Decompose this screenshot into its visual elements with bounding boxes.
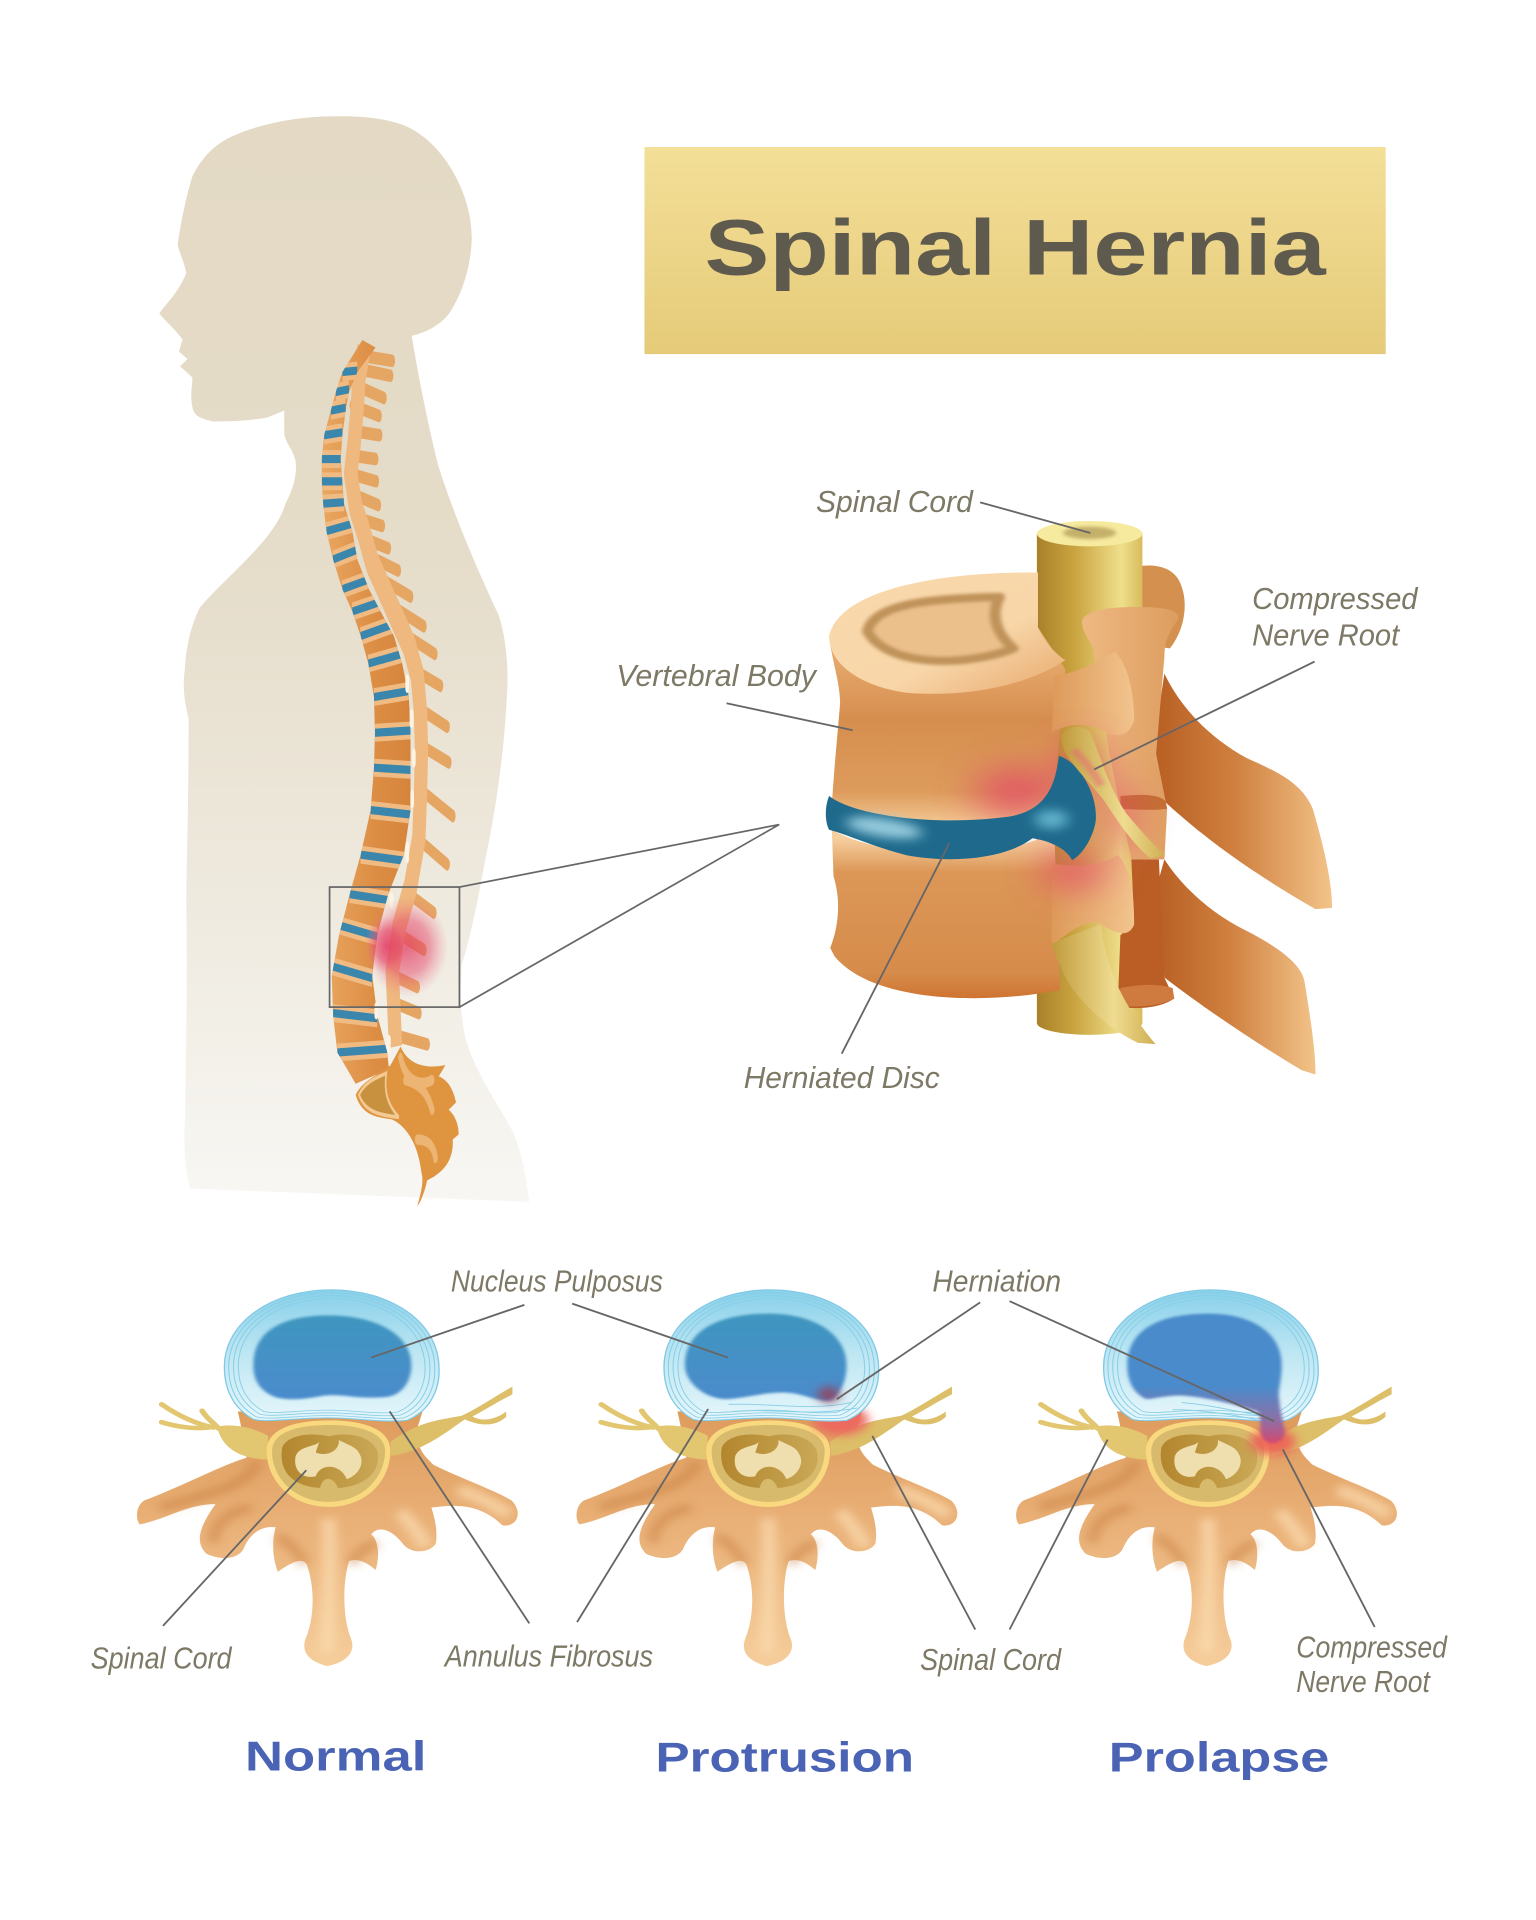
upper vertebral body	[829, 572, 1065, 833]
upper pedicle	[1052, 652, 1134, 735]
label: compressed nerve root	[1094, 582, 1418, 769]
stage heading: normal: Normal	[245, 1732, 426, 1779]
lower pedicle	[1052, 855, 1134, 946]
label: nucleus pulposus	[371, 1264, 728, 1358]
label: vertebral body	[616, 659, 853, 730]
human silhouette	[159, 116, 529, 1202]
stage heading: prolapse: Prolapse	[1109, 1734, 1329, 1781]
label: herniation	[837, 1264, 1274, 1421]
upper nerve root	[1061, 727, 1165, 858]
upper transverse wing	[1153, 674, 1332, 909]
label: spinal cord left: Spinal Cord	[91, 1642, 232, 1676]
label: herniated disc: Herniated Disc	[744, 1061, 940, 1095]
title banner	[644, 147, 1386, 354]
label: vertebral body: Vertebral Body	[616, 659, 818, 693]
detailed vertebra illustration	[826, 521, 1332, 1074]
spine gaps	[376, 678, 414, 1050]
full spine	[322, 340, 459, 1206]
label: compressed nerve root: Nerve Root	[1252, 619, 1401, 653]
lower posterior column	[1118, 859, 1174, 1008]
herniated disc	[826, 756, 1096, 860]
spine discs	[322, 371, 411, 1053]
lower vertebral body	[830, 830, 1060, 998]
stage heading: protrusion: Protrusion	[655, 1734, 914, 1781]
label: spinal cord center: Spinal Cord	[920, 1643, 1062, 1677]
title banner: Spinal Hernia	[704, 203, 1327, 291]
label: spinal cord center	[872, 1436, 1108, 1677]
label: compressed nerve root: Compressed	[1252, 582, 1418, 616]
label: compressed nerve root lower	[1283, 1449, 1448, 1699]
cross-section: prolapse	[1016, 1290, 1397, 1666]
inflammation glow	[975, 737, 1131, 891]
lower transverse wing	[1156, 859, 1316, 1074]
upper posterior column	[1082, 607, 1178, 859]
label: spinal cord	[816, 485, 1090, 533]
label: compressed nerve root lower: Nerve Root	[1296, 1665, 1431, 1699]
pain glow on spine	[365, 897, 448, 997]
cross-section: normal	[137, 1290, 518, 1666]
label: annulus fibrosus: Annulus Fibrosus	[443, 1639, 653, 1673]
zoom box and connector lines	[330, 825, 779, 1007]
lower nerve root	[1052, 925, 1156, 1044]
back process	[1140, 565, 1185, 648]
spinal cord cylinder	[1037, 521, 1142, 1035]
label: herniation: Herniation	[932, 1264, 1061, 1298]
spine processes	[351, 356, 453, 1044]
label: nucleus pulposus: Nucleus Pulposus	[451, 1264, 663, 1298]
vertebral column bodies	[322, 340, 411, 1084]
label: spinal cord: Spinal Cord	[816, 485, 974, 519]
label: spinal cord left	[91, 1470, 306, 1676]
label: annulus fibrosus	[390, 1409, 708, 1673]
label: herniated disc	[744, 843, 950, 1095]
sacrum	[356, 1047, 459, 1206]
label: compressed nerve root lower: Compressed	[1296, 1631, 1448, 1665]
cross-section: protrusion	[577, 1290, 957, 1666]
